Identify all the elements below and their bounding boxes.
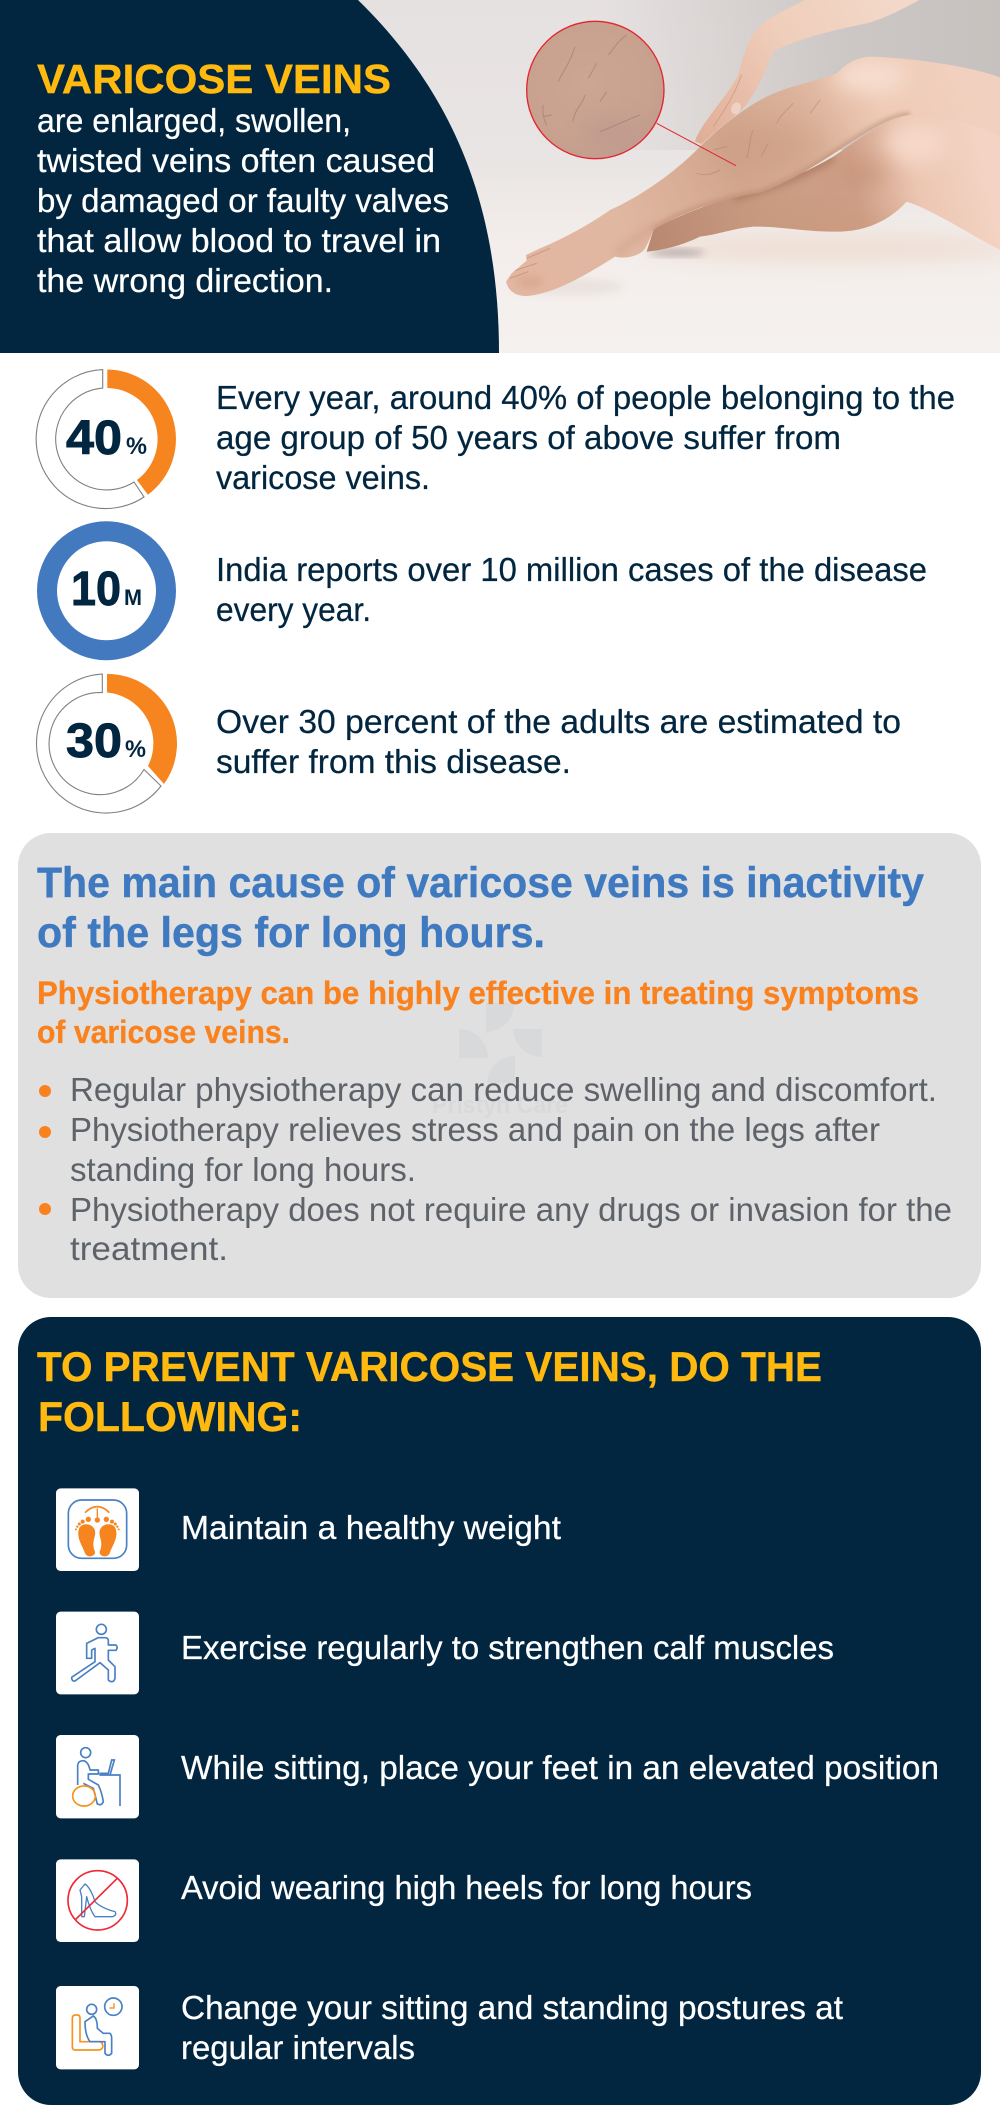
watermark logo: Pristyn Care [432,1092,568,1119]
donut chart 40%: % [126,433,147,460]
stat: 40 percent [36,370,955,509]
heading: main cause: of the legs for long hours. [37,909,545,957]
donut chart 40%: 40 [66,412,122,465]
hero description: by damaged or faulty valves [37,183,449,220]
subheading: physiotherapy [37,975,919,1050]
panel: prevention [18,1317,981,2105]
subheading: physiotherapy: Physiotherapy can be highly effective in treating symptoms [37,975,919,1011]
item text: sitting: While sitting, place your feet in an elevated position [181,1750,939,1787]
stat text 10M: India reports over 10 million cases of the disease [216,552,927,589]
hero description: twisted veins often caused [37,143,435,180]
stat text 10M [216,552,927,629]
stat text 40% [216,380,955,497]
hero description: are enlarged, swollen, [37,103,351,140]
subheading: physiotherapy: of varicose veins. [37,1014,290,1050]
heading: main cause: The main cause of varicose veins is inactivity [37,859,924,907]
heading: to prevent: FOLLOWING: [38,1393,302,1440]
stat: 10 million [47,531,927,650]
navy curved background [0,0,499,353]
stat: 30 percent [37,674,901,813]
donut chart 10M: M [124,585,142,610]
stat text 40%: age group of 50 years of above suffer from [216,420,841,457]
icon: sitting at desk on ball [56,1735,139,1818]
magnified vein inset with pointer [527,21,736,166]
bullet list: Physiotherapy relieves stress and pain on the legs after [70,1112,880,1149]
bullet list: Physiotherapy does not require any drugs or invasion for the [70,1192,952,1229]
panel: hero [0,0,1000,353]
item text: exercise: Exercise regularly to strengthen calf muscles [181,1630,834,1667]
hero photo: legs [340,0,1000,353]
donut chart 40% [36,370,176,509]
stat text 40%: varicose veins. [216,460,430,497]
donut chart 30% [37,674,177,813]
heading: main cause [37,859,924,957]
stat text 10M: every year. [216,592,371,629]
hero description [37,103,449,300]
bullet list [39,1072,952,1268]
item text: postures [181,1990,844,2067]
stat text 30% [216,704,901,781]
heading: to prevent [37,1343,822,1440]
icon: no high heels [56,1859,139,1942]
hero description: the wrong direction. [37,263,333,300]
donut chart 10M: 10 [71,563,121,616]
donut chart 30%: 30 [66,715,122,768]
icon: weighing scale with feet [56,1488,139,1571]
panel: main cause and physiotherapy [18,833,981,1298]
hero title: VARICOSE VEINS [37,56,391,102]
item text: postures: regular intervals [181,2030,415,2067]
item text: postures: Change your sitting and standing postures at [181,1990,844,2027]
donut chart 10M [47,531,166,650]
bullet list: standing for long hours. [70,1152,416,1189]
heading: to prevent: TO PREVENT VARICOSE VEINS, DO THE [37,1343,822,1390]
stat text 30%: suffer from this disease. [216,744,571,781]
bullet list: Regular physiotherapy can reduce swelling and discomfort. [70,1072,937,1109]
item text: heels: Avoid wearing high heels for long hours [181,1870,752,1907]
item text: weight: Maintain a healthy weight [181,1510,562,1547]
stat text 40%: Every year, around 40% of people belonging to the [216,380,955,417]
icon: runner [56,1612,139,1694]
hero description: that allow blood to travel in [37,223,441,260]
icon: change posture with clock [56,1986,139,2069]
bullet list: treatment. [70,1231,228,1268]
watermark logo [432,1003,568,1119]
stat text 30%: Over 30 percent of the adults are estimated to [216,704,901,741]
donut chart 30%: % [125,736,146,763]
